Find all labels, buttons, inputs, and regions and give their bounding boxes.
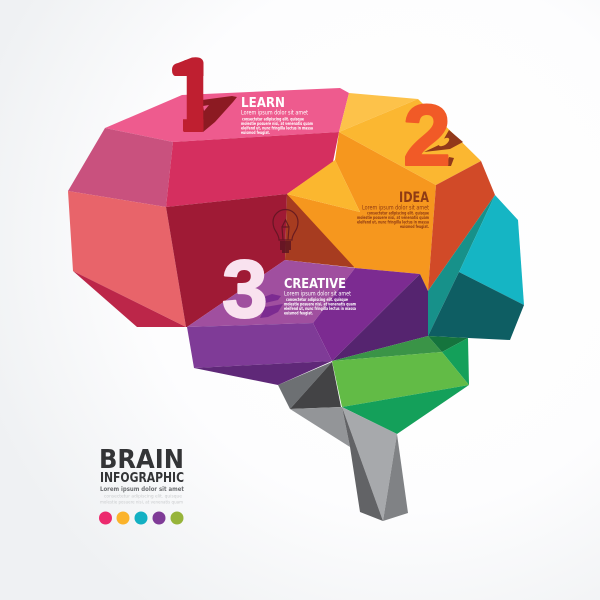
brain: frontal lobe (pink and red) — [68, 88, 349, 327]
number 1 with shadow: 1 — [163, 36, 222, 154]
text block: creative: CREATIVE — [284, 276, 346, 292]
brain: temporal lobe (purple) — [187, 260, 428, 385]
colour dots legend — [99, 512, 184, 524]
title block — [99, 445, 184, 506]
brain stem (grey) — [278, 362, 408, 521]
text block: learn — [241, 95, 313, 135]
text block: idea: Lorem ipsum dolor sit amet — [362, 204, 430, 212]
text block: creative: eleifend ut, nunc fringilla lectus in massa — [284, 306, 356, 311]
text block: learn: eleifend ut, nunc fringilla lectus in massa — [241, 126, 313, 130]
title block: molestie posuere nisi, at venenatis quam — [100, 500, 183, 506]
text block: idea: molestie posuere nisi, at venenatis quam — [357, 215, 429, 220]
text block: creative: molestie posuere nisi, at venenatis quam — [284, 302, 356, 306]
text block: creative — [284, 276, 356, 316]
text block: learn: LEARN — [241, 95, 285, 111]
text block: learn: euismod feugiat. — [241, 130, 270, 135]
number 3 with shadow: 3 — [222, 244, 268, 335]
text block: idea: IDEA — [399, 190, 429, 206]
title block: consectetur adipiscing elit. quisque — [104, 494, 182, 500]
brain: cerebellum (green) — [332, 336, 469, 434]
text block: idea: consectetur adipiscing elit. quisque — [367, 210, 429, 216]
number 2 with shadow: 2 — [403, 88, 451, 184]
text block: learn: Lorem ipsum dolor sit amet — [241, 110, 309, 116]
text block: creative: consectetur adipiscing elit. quisque — [286, 297, 348, 302]
text block: creative: Lorem ipsum dolor sit amet — [284, 290, 352, 298]
text block: idea — [357, 190, 430, 229]
title block: BRAIN — [99, 445, 184, 475]
number 1 with shadow — [172, 57, 237, 132]
brain: occipital lobe (teal) — [428, 195, 524, 340]
text block: learn: consectetur adipiscing elit. quisque — [242, 116, 304, 122]
icon: light bulb — [273, 210, 298, 253]
text block: idea: eleifend ut, nunc fringilla lectus in massa — [357, 220, 429, 224]
text block: creative: euismod feugiat. — [284, 310, 313, 316]
brain: parietal lobe (orange and yellow) — [285, 93, 495, 291]
title block: Lorem ipsum dolor sit amet — [100, 485, 184, 493]
text block: learn: molestie posuere nisi, at venenatis quam — [241, 121, 313, 126]
title block: INFOGRAPHIC — [100, 471, 184, 486]
text block: idea: euismod feugiat. — [400, 224, 429, 229]
